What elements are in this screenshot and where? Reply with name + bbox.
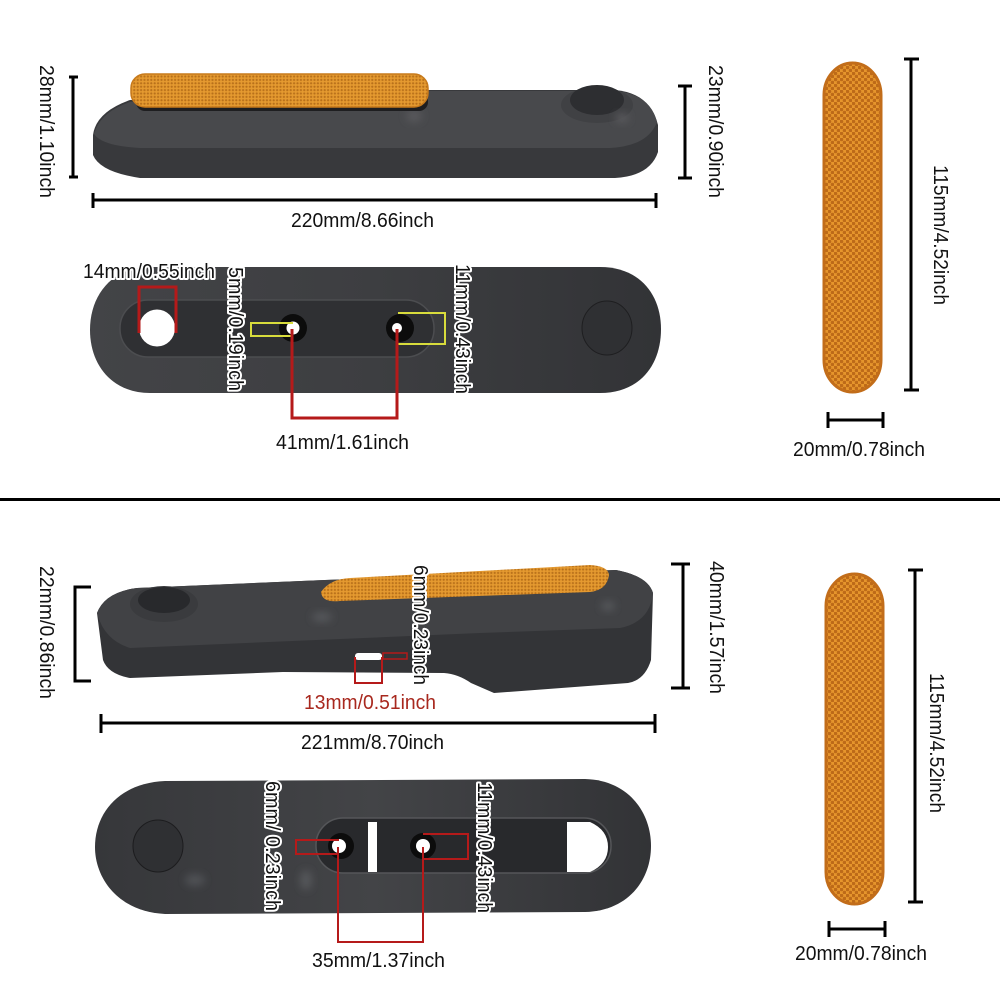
product: reflector front (826, 574, 883, 904)
dimension: 40mm height: 40mm/1.57inch (705, 561, 727, 694)
product: underside view of second cover (95, 779, 651, 914)
product: underside view of cover (90, 267, 661, 393)
dimension: 40mm height (671, 561, 727, 694)
dimension: 20mm reflector width: 20mm/0.78inch (795, 943, 927, 965)
callout: 14mm hole: 14mm/0.55inch (83, 261, 215, 283)
callout: 5mm hole: 5mm/0.19inch (224, 267, 246, 391)
dimension: 221mm length: 221mm/8.70inch (301, 732, 444, 754)
reflector strip (131, 74, 428, 107)
callout: 11mm boss: 11mm/0.43inch (473, 782, 495, 913)
dimension: 28mm height (35, 65, 78, 198)
dimension: 220mm length: 220mm/8.66inch (291, 210, 434, 232)
product: side view of second cover (97, 565, 653, 693)
callout: 14mm hole (83, 261, 215, 333)
dimension: 115mm reflector height (908, 570, 947, 902)
callout: 41mm spacing (276, 329, 409, 454)
dimension: 20mm reflector width (793, 412, 925, 461)
dimension: 20mm reflector width (795, 921, 927, 965)
dimension: 22mm height (35, 566, 91, 699)
callout: 6mm hole: 6mm/ 0.23inch (261, 781, 283, 911)
divider (0, 498, 1000, 501)
callout: 13mm slot: 13mm/0.51inch (304, 692, 436, 714)
dimension: 115mm reflector height: 115mm/4.52inch (929, 165, 951, 305)
reflector strip (321, 565, 609, 601)
product: reflector front (824, 63, 881, 392)
product: side view of cover with reflector (93, 74, 658, 178)
callout: 6mm slot (383, 565, 431, 685)
dimension: 23mm height (678, 65, 726, 198)
dimension: 115mm reflector height (904, 59, 951, 390)
dimension: 22mm height: 22mm/0.86inch (35, 566, 57, 699)
dimension: 20mm reflector width: 20mm/0.78inch (793, 439, 925, 461)
callout: 35mm spacing (312, 847, 445, 972)
dimension: 220mm length (93, 193, 656, 232)
callout: 11mm boss: 11mm/0.43inch (451, 264, 473, 394)
callout: 6mm hole (261, 781, 339, 911)
panel: top product views (35, 59, 951, 461)
dimension: 115mm reflector height: 115mm/4.52inch (925, 673, 947, 813)
callout: 5mm hole (224, 267, 293, 391)
callout: 11mm boss (398, 264, 473, 394)
dimension: 23mm height: 23mm/0.90inch (704, 65, 726, 198)
callout: 35mm spacing: 35mm/1.37inch (312, 950, 445, 972)
dimension: 28mm height: 28mm/1.10inch (35, 65, 57, 198)
dimension: 221mm length (101, 714, 655, 754)
callout: 13mm slot (304, 657, 436, 714)
callout: 6mm slot: 6mm/0.23inch (409, 565, 431, 685)
callout: 41mm spacing: 41mm/1.61inch (276, 432, 409, 454)
panel: bottom product views (35, 561, 947, 972)
callout: 11mm boss (423, 782, 495, 913)
